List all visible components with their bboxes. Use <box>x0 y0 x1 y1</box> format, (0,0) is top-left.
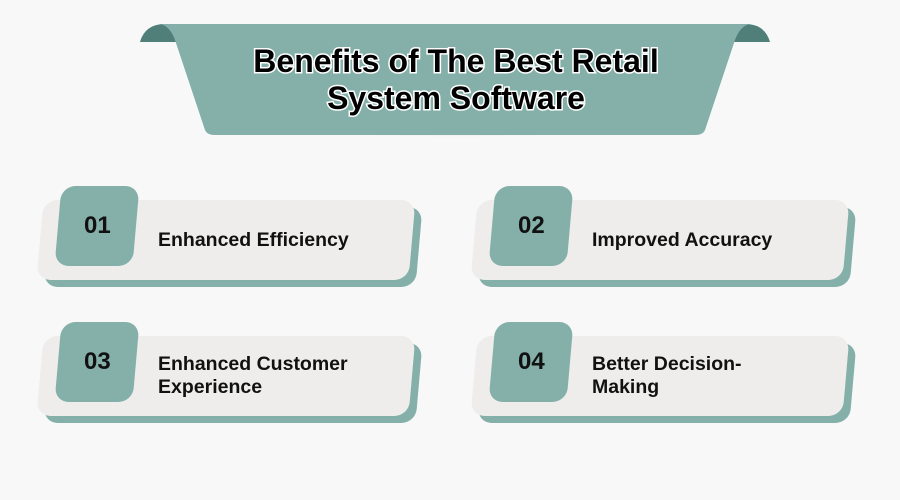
card 04: Better Decision- <box>592 353 742 375</box>
card 01 <box>38 186 422 287</box>
card 04: 04 <box>518 348 544 375</box>
card 04: Making <box>592 376 659 398</box>
banner title <box>140 24 770 135</box>
card 03: Experience <box>158 376 262 398</box>
card 02: Improved Accuracy <box>592 228 772 250</box>
banner title: Benefits of The Best Retail <box>253 43 659 79</box>
banner title: System Software <box>327 80 585 116</box>
card 02: 02 <box>518 212 544 239</box>
card 03: 03 <box>84 348 110 375</box>
card 01: 01 <box>84 212 110 239</box>
card 01: Enhanced Efficiency <box>158 228 349 250</box>
card 04 <box>472 322 856 423</box>
card 03 <box>38 322 422 423</box>
card 03: Enhanced Customer <box>158 353 348 375</box>
card 02 <box>472 186 856 287</box>
